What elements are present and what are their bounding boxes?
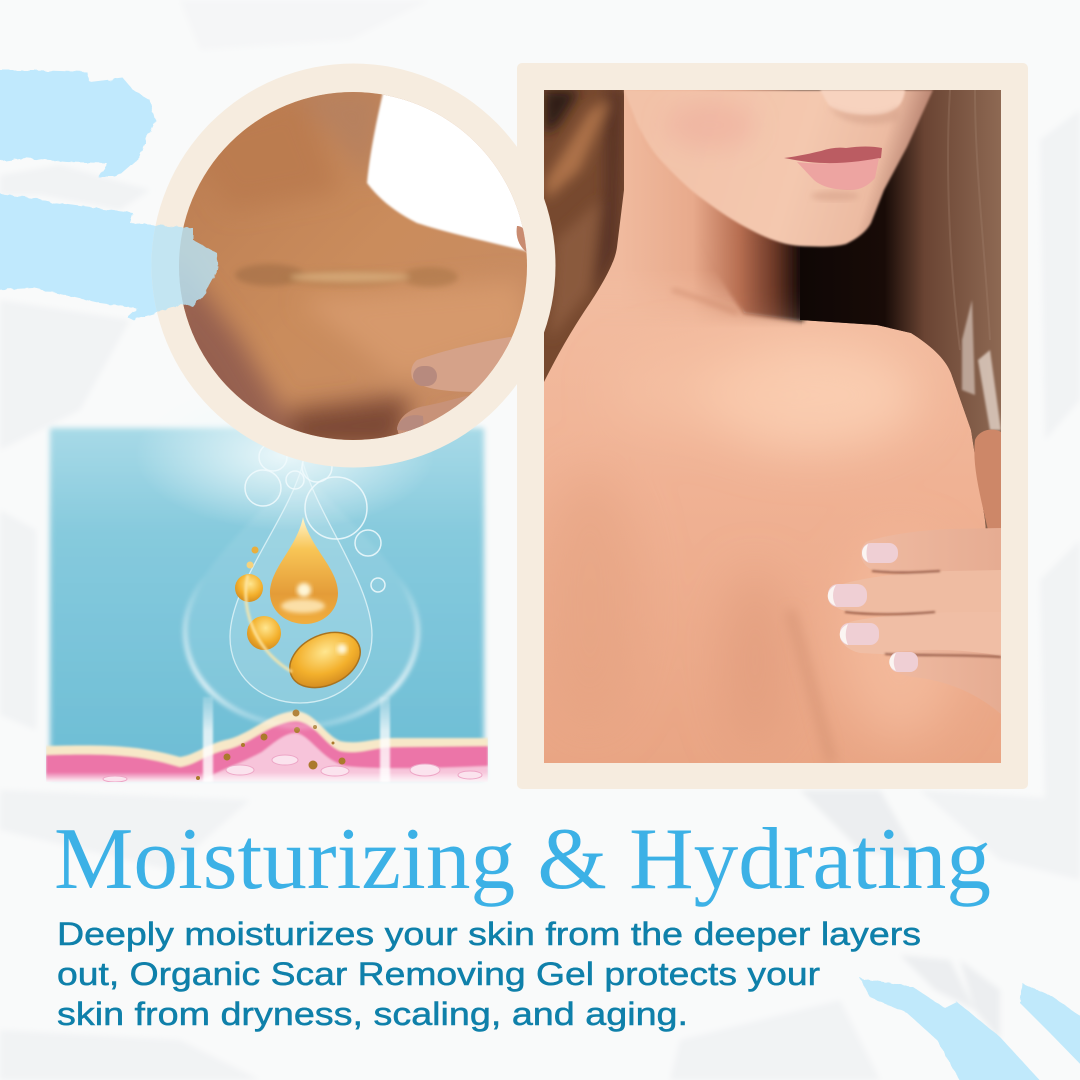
- scar: [235, 264, 458, 287]
- skin cells: [103, 755, 482, 782]
- fingers: [397, 226, 530, 440]
- blue brush stroke: bottom right: [860, 978, 1080, 1080]
- inner water drop: [230, 463, 372, 703]
- bare neck, back and shoulder: [530, 90, 1001, 763]
- fingernails: [828, 543, 918, 672]
- golden drop: [270, 517, 338, 624]
- frame: main photo: [517, 63, 1028, 789]
- body text: Deeply moisturizes your skin from the deeper layers: [57, 916, 921, 952]
- title: Moisturizing & Hydrating: [54, 811, 991, 908]
- chin and face: [624, 90, 933, 247]
- circle inset: scar on shoulder: [152, 64, 556, 468]
- arm crease: [790, 610, 832, 763]
- golden capsules: [235, 546, 369, 698]
- body text: out, Organic Scar Removing Gel protects your: [57, 956, 820, 992]
- right hair: [800, 90, 1001, 528]
- blue brush stroke: middle: [0, 193, 218, 320]
- photo: woman's bare shoulder: [530, 90, 1001, 763]
- nose: [820, 90, 905, 115]
- illustration: oil drop absorbed into skin: [46, 424, 488, 782]
- neck crease: [672, 290, 738, 313]
- light pillars: [203, 697, 390, 782]
- body text: skin from dryness, scaling, and aging.: [57, 996, 688, 1032]
- skin layers: [46, 711, 488, 782]
- illustration background: [50, 428, 484, 778]
- bright background: [367, 88, 532, 253]
- bubbles: [245, 443, 385, 592]
- blue brush overlap on circle: [152, 224, 218, 312]
- blue brush stroke: top: [0, 70, 155, 177]
- left hair: [544, 90, 624, 382]
- brown particles: [196, 710, 346, 780]
- outer water drop: [185, 465, 418, 727]
- body text: [57, 916, 921, 1032]
- hand fingers: [828, 528, 1001, 714]
- back thumb: [974, 430, 1001, 530]
- lips: [784, 146, 882, 163]
